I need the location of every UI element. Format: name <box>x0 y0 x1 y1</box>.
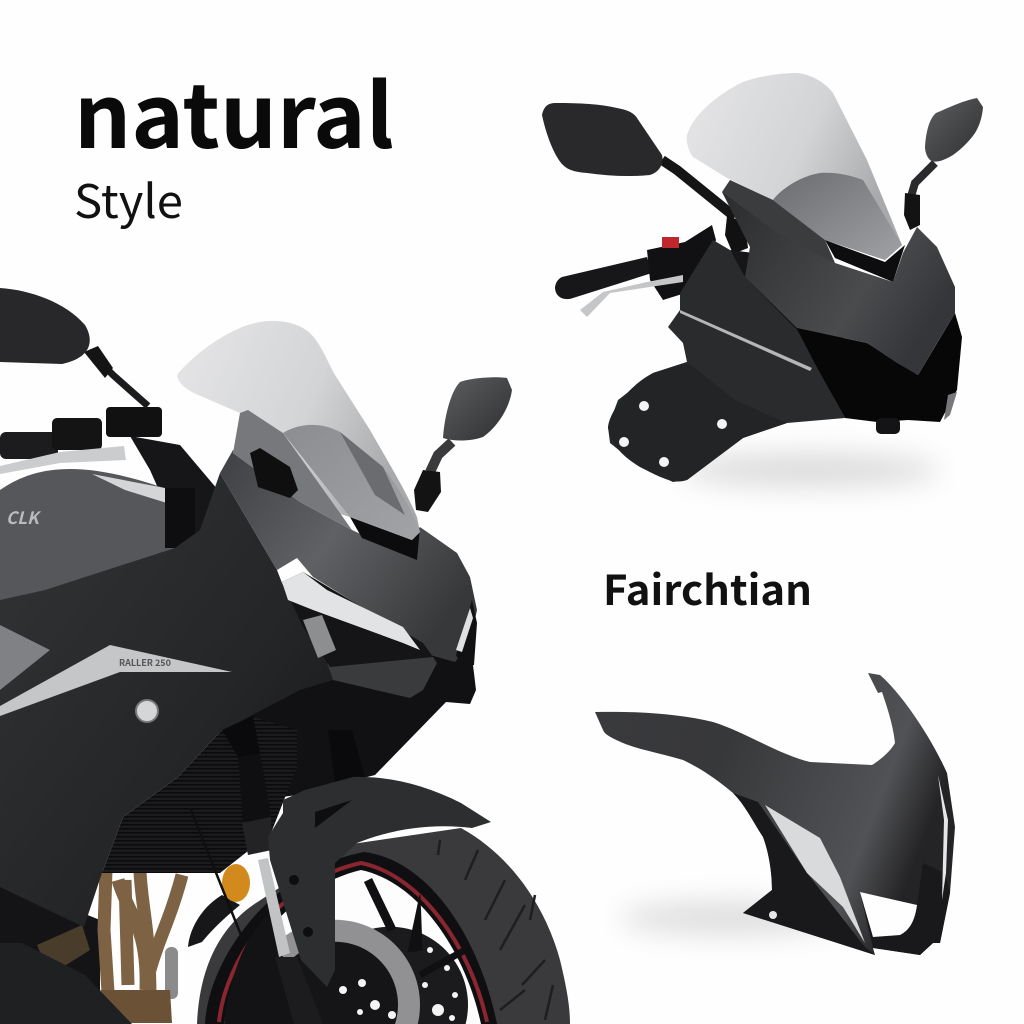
mount plate <box>722 180 835 263</box>
windscreen <box>177 321 420 540</box>
tail plate inner <box>608 362 787 481</box>
mirror mount block <box>250 448 298 498</box>
label: Fairchtian: Fairchtian <box>603 557 812 617</box>
front intake <box>797 313 962 422</box>
side lens sliver <box>938 775 948 900</box>
ground shadow <box>680 454 940 486</box>
side crease highlight <box>680 310 812 371</box>
bolt <box>769 911 777 919</box>
left wheel guard <box>188 895 240 947</box>
caliper side <box>224 912 302 1024</box>
chin opening <box>860 892 917 937</box>
second fork leg <box>328 730 365 790</box>
front fender <box>268 777 491 987</box>
right nose strip <box>456 600 477 667</box>
lower right section <box>860 863 950 955</box>
side panel and tail plate <box>608 240 845 482</box>
left fairing body <box>0 473 333 927</box>
right headlight sliver <box>456 608 473 652</box>
title: natural <box>74 47 394 174</box>
vent under screen <box>350 517 420 560</box>
backing between panels <box>730 250 850 400</box>
side panel silver <box>0 625 50 690</box>
engine bay <box>0 870 182 1023</box>
radiator <box>102 717 297 873</box>
indicator lens <box>765 805 865 943</box>
wheel inner band <box>205 852 497 1024</box>
top right detail: upper fairing with mirrors <box>542 73 983 486</box>
mounting holes <box>619 401 727 467</box>
headlight <box>282 572 433 667</box>
side stripe <box>0 645 232 716</box>
handlebar and controls <box>0 407 225 560</box>
bottom right detail: fairing shell <box>595 673 955 955</box>
fairing bolt <box>136 700 158 722</box>
rim stripe <box>219 863 487 1022</box>
dark under fairing <box>219 600 476 800</box>
lower panel <box>0 943 132 1024</box>
tyre <box>197 828 570 1024</box>
wheel opening <box>224 870 481 1024</box>
subtitle: Style <box>74 166 183 232</box>
fork <box>222 716 323 1024</box>
vent under screen <box>825 240 905 282</box>
front brake disc <box>250 920 420 1024</box>
tank badge: CLK <box>6 504 42 529</box>
right mirror <box>414 377 512 512</box>
small lug <box>876 418 900 434</box>
windscreen <box>687 73 902 260</box>
tread pattern <box>438 840 553 1020</box>
right mirror <box>904 98 983 230</box>
lens edge <box>944 392 957 420</box>
wheel spokes <box>368 880 465 975</box>
lower black section <box>733 793 875 955</box>
tank <box>0 469 190 620</box>
reflector cable <box>190 808 245 945</box>
shell <box>595 673 955 955</box>
left mirror <box>542 103 748 254</box>
main motorcycle illustration <box>0 288 570 1024</box>
upper tank highlight <box>92 474 170 504</box>
nose panel <box>722 192 955 375</box>
handlebar grip <box>555 225 716 317</box>
chin and lower nose <box>327 657 437 698</box>
left mirror <box>0 288 148 406</box>
nose cone <box>220 450 477 662</box>
rear brake disc <box>312 927 468 1024</box>
ground shadow <box>620 902 840 934</box>
fork post <box>165 488 195 548</box>
side decal: RALLER 250 <box>119 656 171 669</box>
amber reflector <box>222 864 250 902</box>
